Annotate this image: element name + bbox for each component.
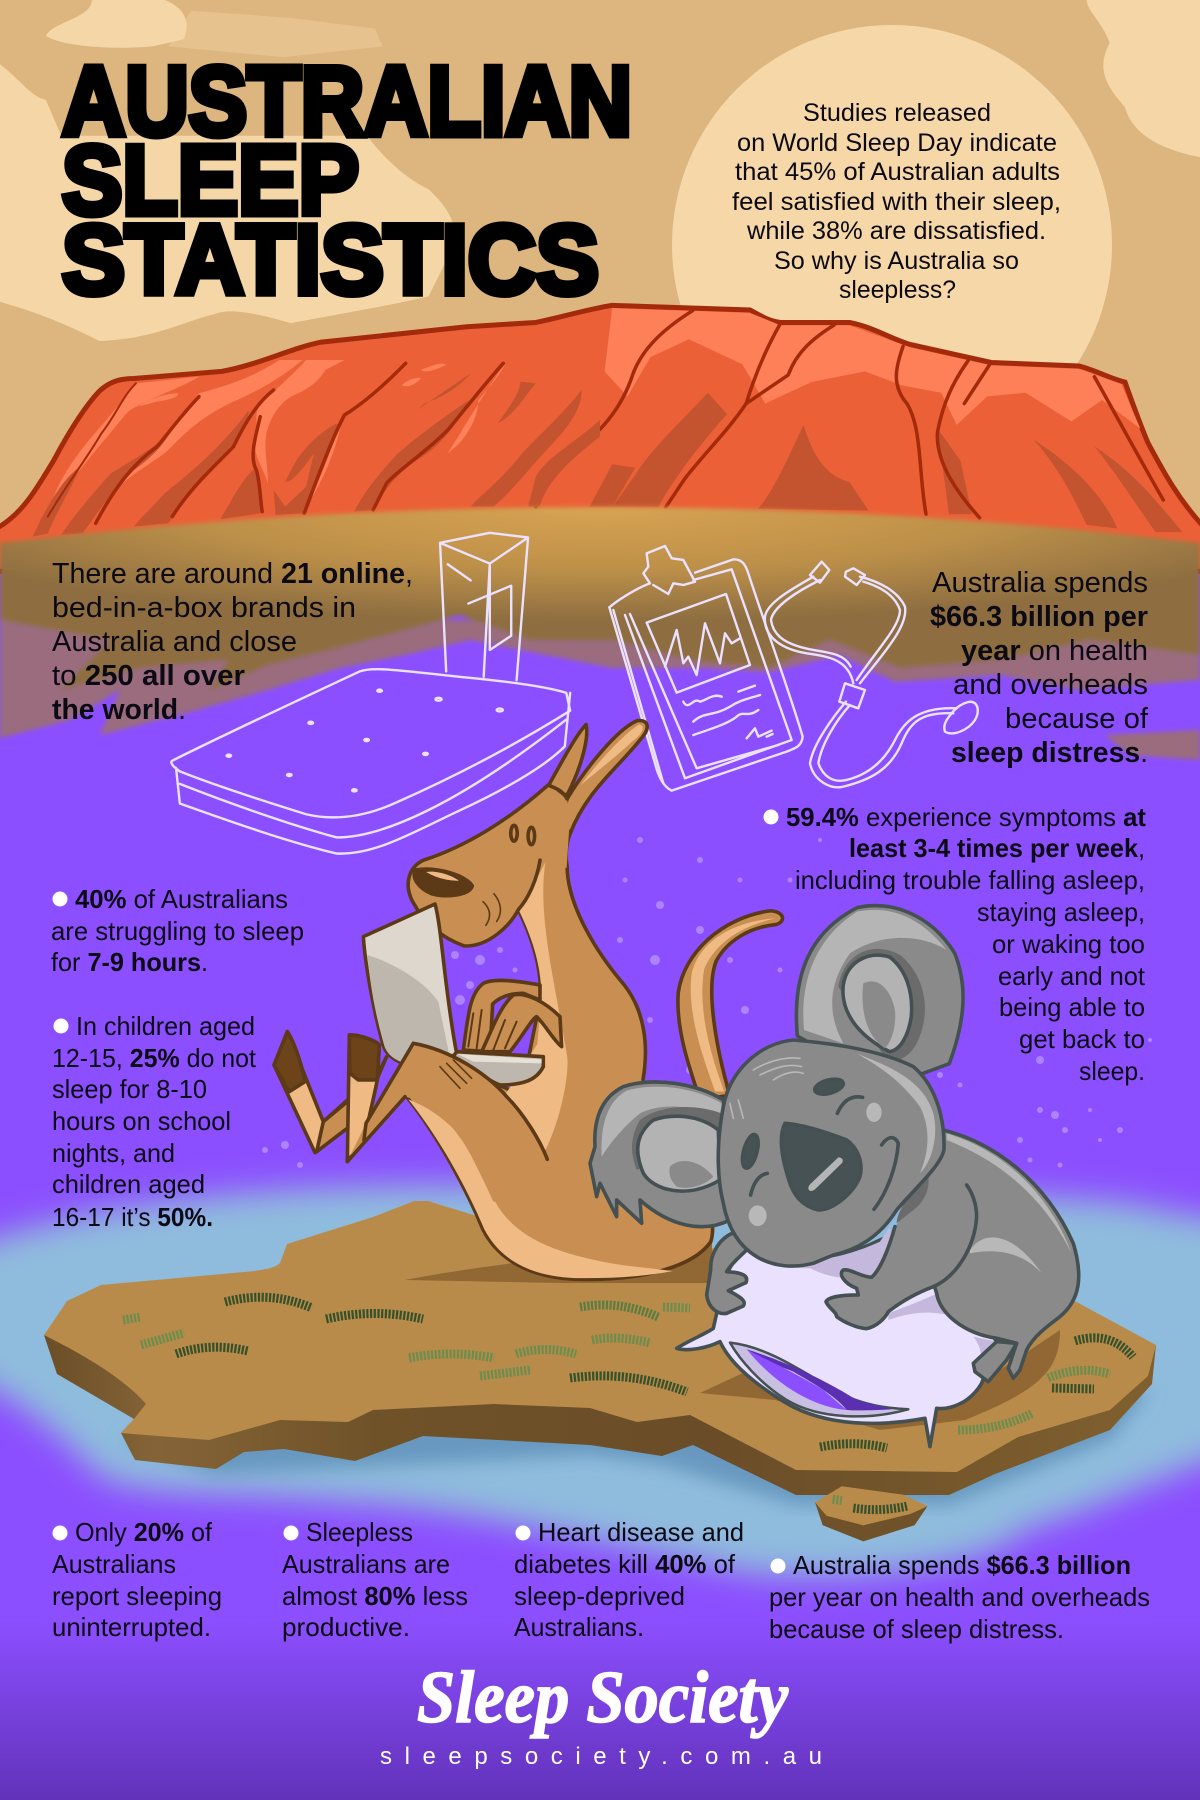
text: bed in a box: Australia and close xyxy=(52,626,297,658)
bullet: 59.4 percent: including trouble falling asleep, xyxy=(795,865,1145,895)
ground brush band xyxy=(0,507,1200,760)
water xyxy=(0,1185,1200,1576)
bullet: 40 percent: for 7-9 hours. xyxy=(51,947,208,977)
bullet: spending: Australia spends $66.3 billion xyxy=(793,1550,1131,1580)
bullet: productivity: Australians are xyxy=(282,1549,450,1579)
text: bed in a box xyxy=(52,558,413,726)
intro text: on World Sleep Day indicate xyxy=(737,129,1057,157)
intro text: while 38% are dissatisfied. xyxy=(746,217,1046,245)
pillow xyxy=(677,1217,997,1447)
Uluru rock xyxy=(0,305,1200,571)
bullet: children: In children aged xyxy=(76,1011,255,1041)
intro text: that 45% of Australian adults xyxy=(735,158,1060,186)
text: bed in a box: the world. xyxy=(52,694,186,726)
bullet: uninterrupted: report sleeping xyxy=(52,1581,222,1611)
pillow shading xyxy=(748,1227,997,1378)
koala xyxy=(590,906,1079,1447)
title: SLEEP xyxy=(62,125,359,235)
bullet: productivity: almost 80% less xyxy=(282,1581,468,1611)
website url: sleepsociety.com.au xyxy=(380,1743,822,1770)
bullet: 59.4 percent: or waking too xyxy=(992,929,1145,959)
koala eyes and cheeks xyxy=(813,1076,845,1097)
intro text: So why is Australia so xyxy=(774,247,1019,275)
koala body xyxy=(913,1130,1079,1378)
laptop screen xyxy=(363,904,457,1063)
bullet: uninterrupted: uninterrupted. xyxy=(52,1612,211,1642)
bullet: 59.4 percent xyxy=(764,802,1146,1086)
purple main background xyxy=(0,600,1200,1800)
text: health spending: Australia spends xyxy=(932,567,1148,599)
bullet: spending xyxy=(769,1550,1150,1644)
kangaroo feet, laptop and arms xyxy=(274,904,562,1202)
bullet: uninterrupted: Only 20% of xyxy=(75,1517,213,1547)
logo: Sleep Society: Sleep Society xyxy=(417,1657,789,1739)
tail highlight xyxy=(691,918,776,1091)
laptop base xyxy=(453,1052,543,1085)
title: STATISTICS xyxy=(62,204,599,314)
koala smile xyxy=(874,1138,898,1209)
title xyxy=(62,46,632,314)
intro text xyxy=(732,99,1061,304)
bullet: spending: because of sleep distress. xyxy=(769,1614,1064,1644)
text: health spending: because of xyxy=(1005,703,1149,735)
koala arm right xyxy=(826,1183,977,1329)
bullet: children: children aged xyxy=(52,1169,205,1199)
bullet: heart disease xyxy=(514,1517,744,1642)
sky background xyxy=(0,0,1200,560)
bullet: children: nights, and xyxy=(52,1138,175,1168)
background clouds xyxy=(0,0,1200,341)
bullet: 59.4 percent: staying asleep, xyxy=(977,897,1145,927)
kangaroo tail xyxy=(678,911,783,1099)
text: health spending: year on health xyxy=(961,635,1148,667)
kangaroo body xyxy=(407,834,713,1279)
bullet: heart disease: sleep-deprived xyxy=(514,1581,685,1611)
pillow pocket xyxy=(730,1343,908,1416)
text: health spending: and overheads xyxy=(953,669,1148,701)
bullet: heart disease: Heart disease and xyxy=(538,1517,744,1547)
kangaroo ears xyxy=(545,721,647,834)
bullet: 59.4 percent: get back to xyxy=(1019,1024,1145,1054)
bullet: productivity: Sleepless xyxy=(306,1517,413,1547)
bullet: children: 16-17 it’s 50%. xyxy=(52,1202,213,1232)
icon: clipboard xyxy=(609,546,803,791)
bullet: 59.4 percent: early and not xyxy=(998,961,1146,991)
koala nose xyxy=(781,1123,861,1210)
bullet: productivity xyxy=(282,1517,468,1642)
koala top ear xyxy=(796,906,963,1078)
map top surface xyxy=(44,1201,1156,1472)
Australia map xyxy=(44,1201,1156,1505)
bullet: uninterrupted xyxy=(52,1517,222,1642)
pillow shadow xyxy=(700,1330,1060,1430)
bullet: 59.4 percent: least 3-4 times per week, xyxy=(849,833,1145,863)
intro text: Studies released xyxy=(803,99,991,127)
bullet: heart disease: Australians. xyxy=(514,1612,644,1642)
kangaroo chest and belly xyxy=(408,862,673,1278)
bullet: children: hours on school xyxy=(52,1106,231,1136)
bullet: children xyxy=(52,1011,257,1232)
title: AUSTRALIAN xyxy=(62,46,632,156)
kangaroo arms xyxy=(463,980,540,1052)
bullet: 40 percent: 40% of Australians xyxy=(75,884,288,914)
icon: stethoscope xyxy=(765,562,978,787)
bullet: uninterrupted: Australians xyxy=(52,1549,176,1579)
bullet: 40 percent xyxy=(51,884,304,977)
intro text: feel satisfied with their sleep, xyxy=(732,188,1061,216)
bullet: 59.4 percent: being able to xyxy=(999,992,1145,1022)
bullet: heart disease: diabetes kill 40% of xyxy=(514,1549,736,1579)
bullet: 40 percent: are struggling to sleep xyxy=(51,916,304,946)
koala left ear xyxy=(590,1082,730,1227)
koala arm left xyxy=(707,1232,748,1314)
paint splatter xyxy=(262,837,1152,1168)
text: health spending: sleep distress. xyxy=(951,737,1148,769)
grass tufts xyxy=(123,1297,1133,1448)
text: health spending xyxy=(930,567,1149,769)
bullet: spending: per year on health and overheads xyxy=(769,1582,1150,1612)
text: bed in a box: There are around 21 online, xyxy=(52,558,413,590)
text: bed in a box: bed-in-a-box brands in xyxy=(52,592,356,624)
bullet: 59.4 percent: 59.4% experience symptoms at xyxy=(786,802,1146,832)
bullet: children: sleep for 8-10 xyxy=(52,1074,207,1104)
Tasmania xyxy=(815,1486,928,1541)
kangaroo head xyxy=(408,785,570,946)
text: health spending: $66.3 billion per xyxy=(930,601,1148,633)
bullet: productivity: productive. xyxy=(282,1612,410,1642)
intro text: sleepless? xyxy=(839,276,956,304)
icon: mattress and box outline xyxy=(171,533,570,854)
koala head xyxy=(718,1040,944,1266)
kangaroo xyxy=(274,721,783,1279)
bullet: children: 12-15, 25% do not xyxy=(52,1043,257,1073)
map side face xyxy=(44,1335,1156,1495)
water shadow under map xyxy=(120,1390,1150,1505)
bullet: 59.4 percent: sleep. xyxy=(1079,1056,1145,1086)
text: bed in a box: to 250 all over xyxy=(52,660,245,692)
kangaroo shadow xyxy=(405,1240,712,1283)
sun circle xyxy=(672,25,1112,465)
footer gradient band xyxy=(0,1620,1200,1800)
kangaroo leg xyxy=(347,1043,547,1202)
